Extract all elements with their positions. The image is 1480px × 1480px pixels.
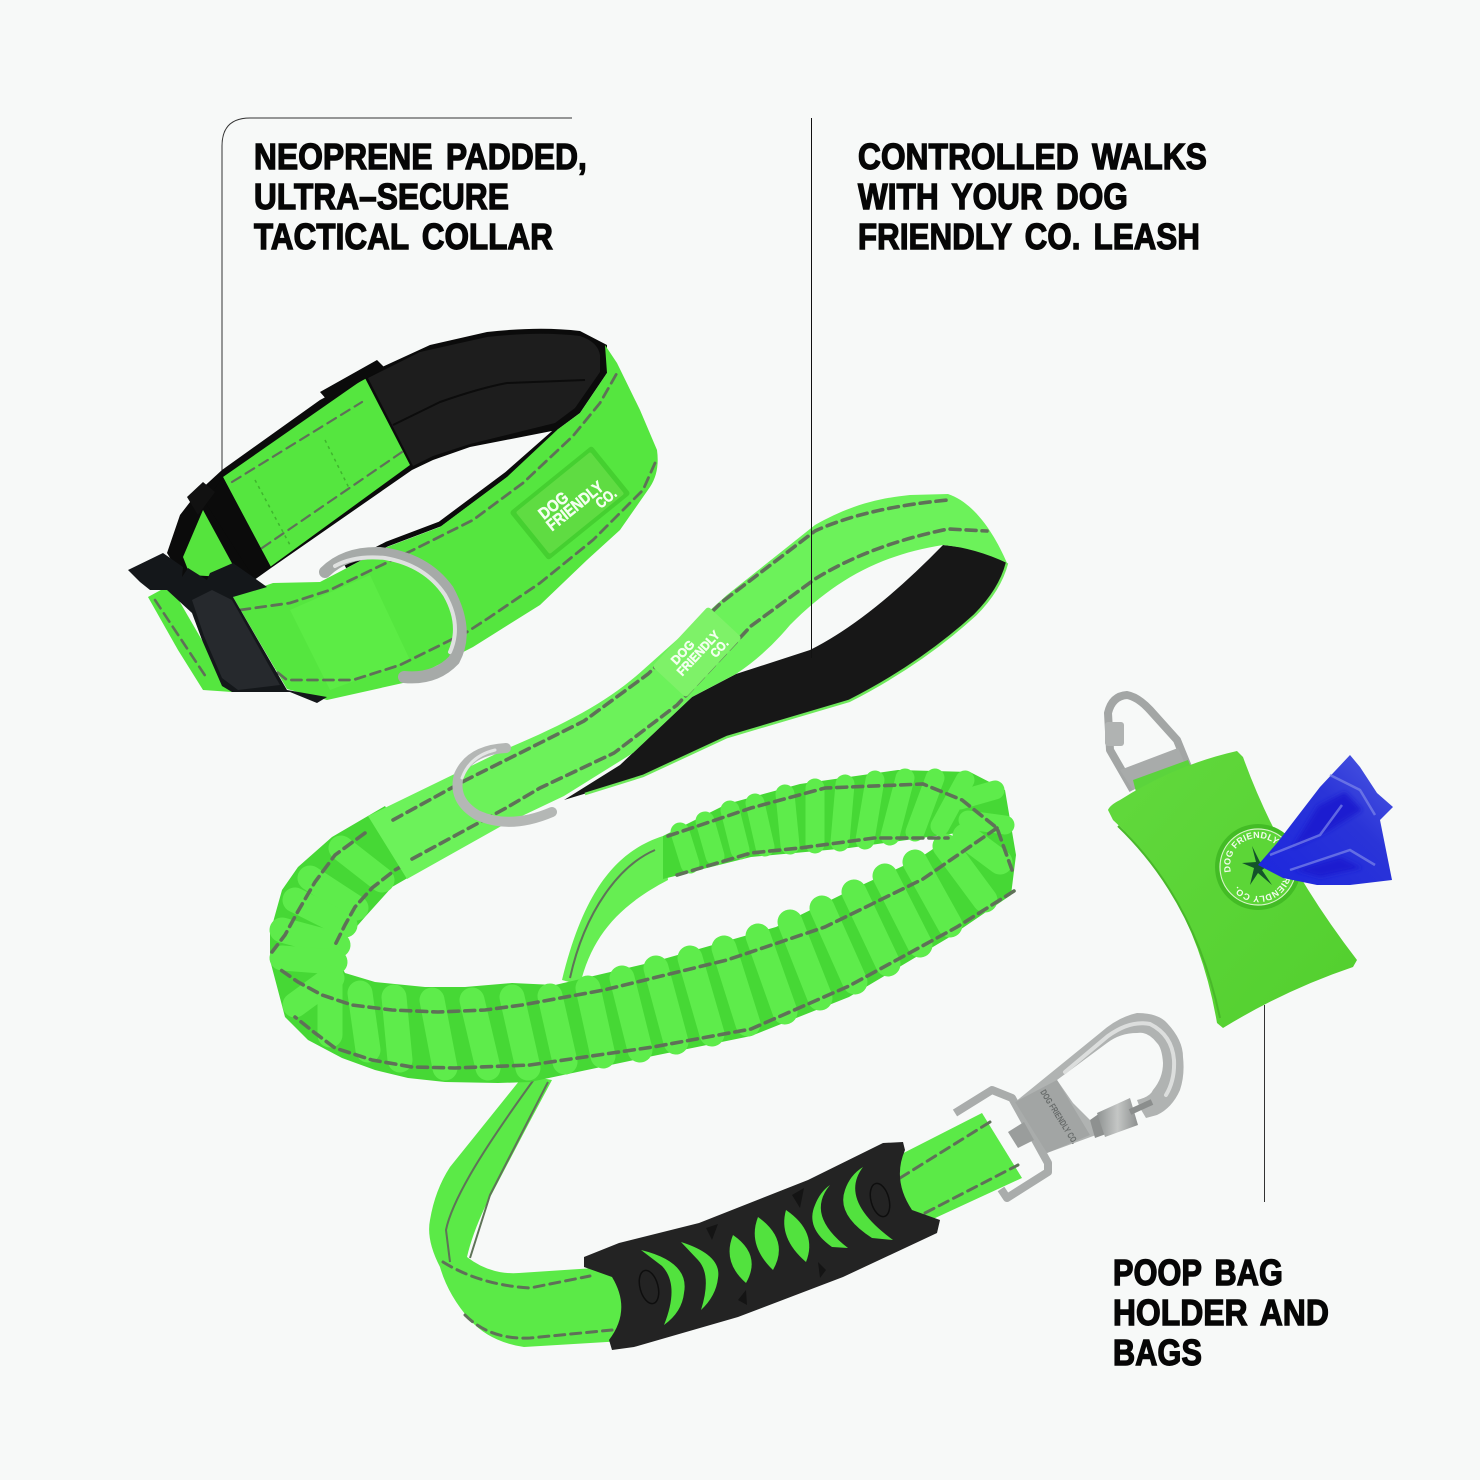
- heading: leash: CONTROLLED WALKS: [858, 136, 1207, 177]
- collar band black edge: [345, 430, 557, 566]
- holder pouch: [1108, 751, 1357, 1028]
- callout line: collar: [222, 118, 572, 472]
- bag folds: [1270, 775, 1375, 870]
- heading: poop bag holder: POOP BAG: [1113, 1252, 1283, 1293]
- bungee base: [270, 770, 1016, 1083]
- heading: poop bag holder: BAGS: [1113, 1332, 1202, 1373]
- collar left stub: [148, 585, 232, 692]
- heading: collar: [254, 136, 587, 257]
- collar slider: [320, 360, 385, 400]
- leash: [270, 494, 1184, 1350]
- leash lower strap stitching: [443, 1078, 612, 1338]
- leash upper strap stitching: [570, 850, 655, 978]
- hook rectangular loop: [955, 1090, 1048, 1198]
- handle rubber badge: CO.: [708, 636, 731, 660]
- handle stitching: [393, 500, 987, 859]
- carabiner plate: [1120, 748, 1186, 790]
- leash right strap stitching: [900, 1122, 1018, 1213]
- handle green band: [368, 494, 1007, 879]
- leash D-ring: [457, 748, 552, 822]
- carabiner lock: [1105, 722, 1124, 746]
- handle neoprene padding: [564, 545, 1007, 800]
- callout line: leash: [810, 118, 812, 658]
- leash D-ring highlight: [462, 750, 495, 778]
- collar neoprene lining: [368, 334, 600, 466]
- heading: leash: [858, 136, 1207, 257]
- pouch badge lettering: [1224, 832, 1290, 902]
- blue poop bag: [1258, 755, 1393, 885]
- collar back stitching: [232, 402, 402, 548]
- heading: leash: FRIENDLY CO. LEASH: [858, 216, 1200, 257]
- collar rubber badge: CO.: [592, 485, 620, 512]
- pouch dispenser slit: [1242, 846, 1275, 885]
- hook engraved brand: DOG FRIENDLY CO.: [1038, 1088, 1080, 1146]
- handle padding trim: [585, 563, 1007, 794]
- collar buckle plate: [192, 590, 280, 690]
- grip moulded triangles: [706, 1188, 826, 1305]
- hook lock barrel: [1097, 1098, 1138, 1137]
- collar back green section: [223, 378, 410, 567]
- collar band stitching: [155, 373, 655, 680]
- traffic handle rubber grip: [584, 1142, 940, 1350]
- snap hook: [955, 1013, 1184, 1198]
- heading: collar: ULTRA–SECURE: [254, 176, 509, 217]
- pouch badge lettering: FRIENDLY CO.: [1236, 878, 1290, 902]
- heading: collar: NEOPRENE PADDED,: [254, 136, 587, 177]
- leash lower strap: [429, 1075, 640, 1347]
- heading: poop bag holder: [1113, 1252, 1329, 1373]
- collar front green band: [233, 345, 658, 700]
- handle rubber badge: DOG: [668, 637, 698, 668]
- hook gate neck: [1090, 1113, 1106, 1138]
- tactical collar: [128, 329, 658, 703]
- grip openings: [641, 1167, 893, 1325]
- hook gate tip: [1130, 1102, 1152, 1112]
- handle rubber badge: [652, 606, 742, 698]
- collar rubber badge: DOG: [535, 489, 572, 523]
- hook body: [1015, 1013, 1184, 1153]
- bag dark folds: [1292, 792, 1362, 877]
- pouch round badge: [1215, 824, 1301, 910]
- pouch badge inner: [1220, 829, 1296, 905]
- bungee upper ribs: [680, 778, 1005, 864]
- collar band fold highlight: [290, 575, 410, 690]
- collar D-ring: [325, 553, 461, 677]
- hook swivel pin: [1008, 1122, 1034, 1148]
- hook highlight: [1065, 1023, 1174, 1095]
- bungee ribs: [282, 836, 1000, 1068]
- leash upper strap: [562, 836, 668, 985]
- collar black outer rim: [167, 329, 607, 590]
- collar metal buckle: [128, 553, 327, 703]
- collar rubber badge: [509, 446, 631, 560]
- collar D-ring highlight: [335, 557, 455, 652]
- grip ovals: [636, 1181, 893, 1306]
- heading: collar: TACTICAL COLLAR: [254, 216, 553, 257]
- pouch badge lettering: DOG FRIENDLY: [1224, 832, 1280, 872]
- holder webbing: [1133, 760, 1192, 792]
- pouch edge shading: [1118, 826, 1220, 1018]
- leash right strap: [880, 1113, 1022, 1225]
- heading: leash: WITH YOUR DOG: [858, 176, 1128, 217]
- poop bag holder: [1104, 691, 1393, 1028]
- collar black webbing strap: [205, 477, 271, 575]
- collar side keeper: [187, 482, 215, 515]
- collar rubber badge: FRIENDLY: [543, 478, 607, 535]
- callout line: bag holder: [1264, 1005, 1266, 1202]
- heading: poop bag holder: HOLDER AND: [1113, 1292, 1329, 1333]
- handle rubber badge: FRIENDLY: [674, 628, 723, 679]
- collar inner left green: [183, 510, 240, 578]
- holder carabiner: [1108, 695, 1188, 790]
- bungee stitching: [272, 784, 1014, 1068]
- hook swivel plate: [1015, 1080, 1090, 1153]
- collar lining seam: [393, 380, 585, 425]
